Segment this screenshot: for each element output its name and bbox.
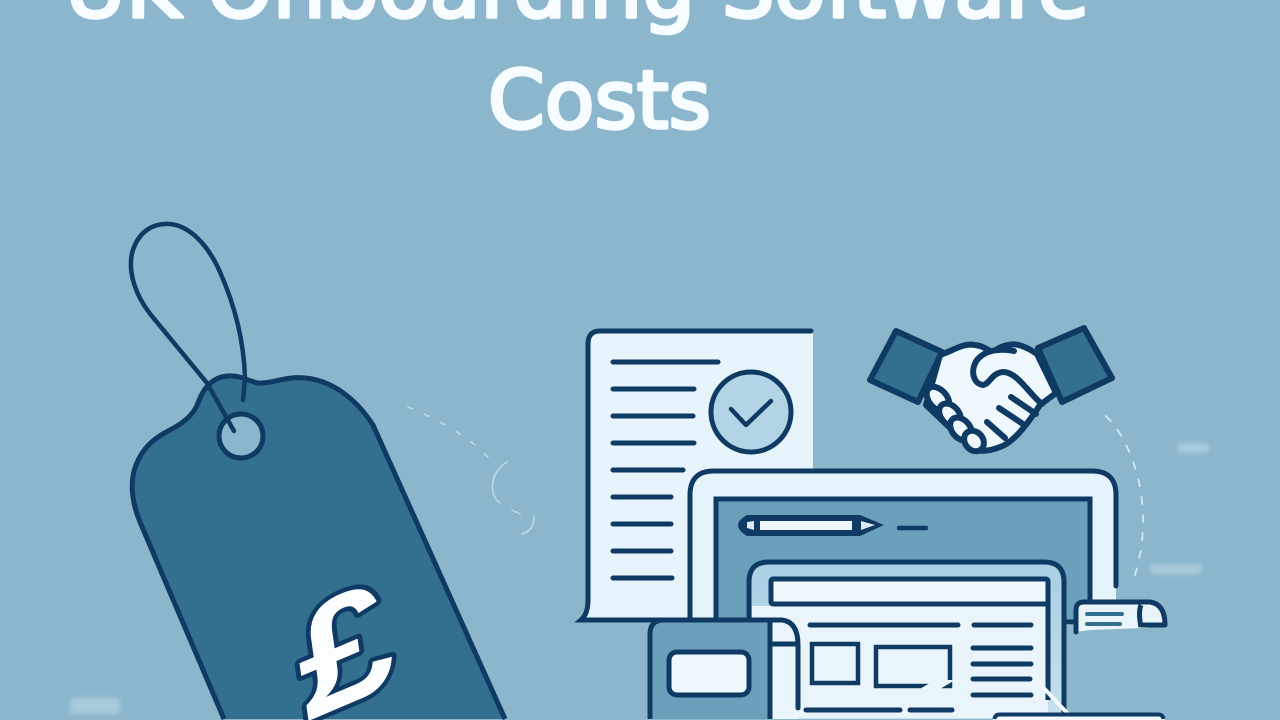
left cuff: [870, 331, 942, 402]
notebook: [650, 620, 798, 719]
browser header bar: [771, 579, 1048, 604]
title: [65, 0, 1089, 147]
laptop: [690, 471, 1116, 719]
dashed motion arc right: [1106, 416, 1143, 575]
icon: price tag with pound sign: [131, 224, 505, 720]
pencil: [738, 515, 926, 536]
soft background smudges: [70, 443, 1209, 714]
fingers: [922, 382, 988, 455]
dashed motion arc left: [408, 407, 534, 534]
small note card: [1076, 602, 1165, 632]
browser content lines: [806, 625, 1031, 710]
laptop screen: [716, 499, 1090, 622]
browser window: [749, 562, 1064, 719]
document text lines: [613, 362, 718, 578]
right cuff: [1038, 328, 1112, 402]
icon: handshake: [870, 328, 1112, 455]
title: Costs: [488, 54, 711, 147]
check badge: [711, 372, 791, 452]
tag string: [131, 224, 245, 431]
icon: document with check: [581, 331, 820, 620]
bottom right card: [993, 684, 1165, 720]
notebook label: [669, 652, 749, 695]
browser content boxes: [812, 644, 858, 683]
thumb and finger lines: [973, 350, 1042, 404]
